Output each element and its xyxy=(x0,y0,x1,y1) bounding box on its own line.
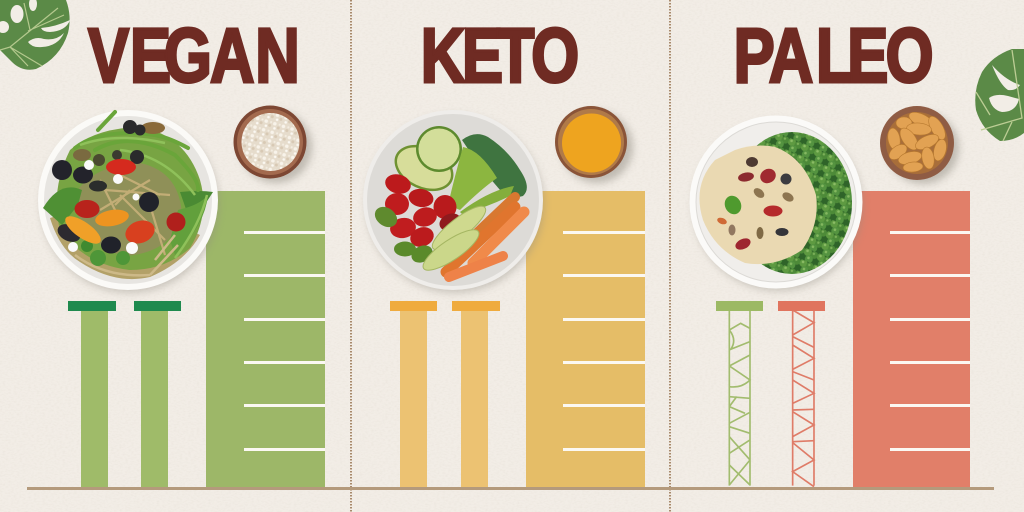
small pillar right xyxy=(452,301,500,487)
lattice pillar green xyxy=(716,301,763,486)
panel: vegan xyxy=(0,0,325,487)
divider: right xyxy=(669,0,671,512)
baseline xyxy=(27,487,994,490)
small pillar right xyxy=(134,301,181,487)
tall bar xyxy=(206,191,325,487)
tall bar xyxy=(526,191,645,487)
small pillar left xyxy=(390,301,437,487)
icon: bowl of grains xyxy=(234,106,312,183)
icon: salad plate xyxy=(38,110,219,293)
icon: monstera leaf top left xyxy=(0,0,70,70)
small pillar left xyxy=(68,301,116,487)
icon: bowl of turmeric xyxy=(555,106,633,183)
panel: paleo xyxy=(690,12,1024,487)
lattice pillar red xyxy=(778,301,825,487)
icon: patty and peas plate xyxy=(690,116,863,291)
panel: keto xyxy=(363,12,645,487)
icon: bowl of nuts xyxy=(880,106,959,184)
icon: vegetable plate xyxy=(363,110,544,293)
title: VEGAN: VEGAN xyxy=(88,12,300,99)
title: PALEO: PALEO xyxy=(734,12,934,99)
icon: monstera leaf right xyxy=(975,49,1024,141)
title: KETO: KETO xyxy=(421,12,579,99)
tall bar xyxy=(853,191,970,487)
divider: left xyxy=(350,0,352,512)
